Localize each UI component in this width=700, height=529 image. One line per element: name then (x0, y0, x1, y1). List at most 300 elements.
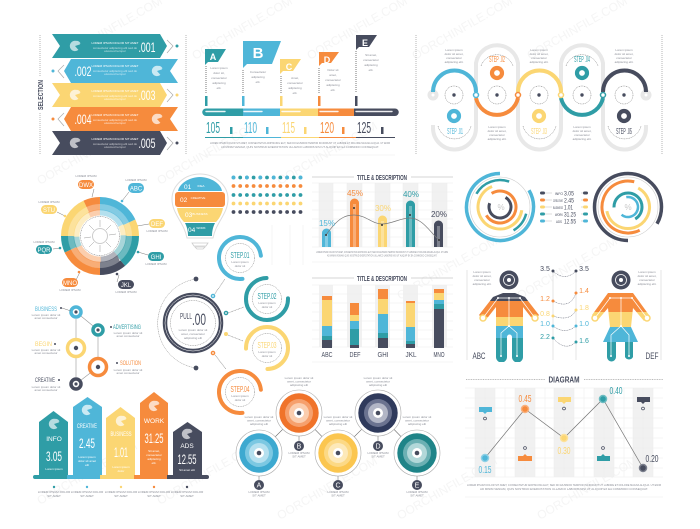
step 02 (246, 278, 288, 320)
band 04: WORK (196, 226, 206, 230)
arrow info (39, 411, 68, 476)
step 01 (217, 235, 263, 281)
arrow captions: SIT AMET (80, 494, 94, 498)
node begin: amet consectetur (34, 351, 58, 355)
connectors (211, 279, 244, 369)
point values: 0.45 (518, 394, 532, 405)
donut chart (50, 186, 150, 286)
node advertising: amet consectetur (116, 334, 140, 338)
point values: 0.30 (558, 446, 571, 457)
rings legend: 31.25 (564, 212, 577, 218)
circle D: adipiscing elit (369, 383, 387, 387)
circle C: Lorem ipsum dolor sit (324, 415, 352, 419)
circle D (355, 376, 401, 458)
stack ABC (322, 296, 332, 348)
circle C: SIT AMET (331, 494, 345, 498)
step 02: dolor sit (262, 305, 272, 309)
ribbon 005: LOREM IPSUM DOLOR SIT AMET (92, 137, 139, 141)
arrow business (106, 407, 135, 476)
arrow captions: SIT AMET (180, 494, 194, 498)
watermark: OORCHINFILE.COM (154, 439, 260, 508)
measure values right: 1.8 (579, 305, 589, 312)
circle C: adipiscing elit (329, 422, 347, 426)
step captions: adipiscing elit. (488, 137, 507, 141)
step 01: STEP.01 (230, 251, 250, 260)
flag C: Amet, (291, 76, 299, 80)
arrow work: consectetur (146, 453, 162, 457)
figure notes: dolor sit amet, (638, 274, 657, 278)
category labels: ABC (322, 352, 332, 359)
panel: circles a to e (236, 376, 440, 498)
ribbon 004: LOREM IPSUM DOLOR SIT AMET (92, 113, 139, 117)
point values: 0.15 (478, 465, 492, 476)
measure values left: 1.2 (540, 296, 550, 303)
step 04: Lorem ipsum (231, 394, 249, 398)
node creative: amet consectetur (34, 388, 58, 392)
coloured wave (433, 70, 646, 115)
ribbon 005: eiusmod tempor (104, 145, 126, 149)
arrow creative: elit (85, 463, 89, 467)
circle D: LOREM IPSUM (367, 451, 389, 455)
donut labels: LOREM IPSUM (145, 262, 167, 266)
node business: BUSINESS (35, 306, 57, 313)
bulb base (192, 243, 208, 249)
step labels (447, 55, 632, 136)
bar values: 15% (319, 219, 335, 228)
node advertising: ADVERTISING (113, 324, 141, 331)
step captions: Lorem ipsum (530, 48, 548, 52)
flag D (318, 52, 341, 106)
timeline values (205, 120, 395, 138)
figure notes: adipiscing elit. (473, 282, 492, 286)
ribbon 002: .002 (74, 63, 92, 79)
watermark: OORCHINFILE.COM (34, 439, 140, 508)
category labels: JKL (406, 352, 417, 359)
heading: selection: SELECTION (38, 80, 45, 110)
arrow ads: 12.55 (178, 451, 197, 467)
timeline caption: LOREM IPSUM DOLOR SIT AMET, CONSECTETUR ADIPISCING ELIT, SED DO EIUSMOD TEMPOR INCIDIDUNT UT LABORE ET DOLORE MAGNA ALIQUA. UT ENIM (210, 141, 390, 145)
circle B: Lorem ipsum dolor sit (285, 376, 314, 380)
step captions: Lorem ipsum (445, 48, 463, 52)
step captions: adipiscing elit. (573, 137, 592, 141)
step 03: dolor sit (262, 354, 272, 358)
ribbon 004 (52, 107, 178, 131)
dots grid (234, 178, 300, 212)
flag B: adipiscing (251, 75, 265, 79)
node solution: Lorem ipsum dolor sit (114, 368, 142, 372)
ribbon 001: LOREM IPSUM DOLOR SIT AMET (92, 41, 139, 45)
point values (478, 386, 659, 476)
flag D: adipiscing (326, 83, 340, 87)
step 01: dolor sit (235, 264, 245, 268)
step captions: Lorem ipsum (615, 48, 633, 52)
circle C (315, 415, 361, 498)
flag A: consectetur (211, 76, 227, 80)
flag A: A (210, 52, 217, 62)
donut labels: PQR (37, 248, 51, 254)
circle B: adipiscing elit (290, 383, 308, 387)
circle E: Lorem ipsum dolor sit (403, 415, 432, 419)
stack JKL (406, 301, 415, 348)
figure notes: dolor sit amet, (473, 274, 492, 278)
measure values left: 0.8 (540, 311, 550, 318)
circle C: LOREM IPSUM (327, 490, 349, 494)
ribbon 003: LOREM IPSUM DOLOR SIT AMET (92, 89, 139, 93)
rings legend: 1.01 (564, 206, 574, 212)
circle D: Lorem ipsum dolor sit (364, 376, 392, 380)
arrow info: INFO (46, 436, 62, 443)
connectors (259, 413, 417, 453)
stack GHI (378, 289, 388, 348)
arrow captions: LOREM IPSUM DOLOR (138, 490, 171, 494)
trend line (325, 207, 440, 241)
arrow work: elit. (152, 461, 156, 465)
ribbon 002: LOREM IPSUM DOLOR SIT AMET (92, 64, 139, 68)
chart grid (312, 183, 453, 247)
ribbon 001: consectetur adipiscing elit sed do (93, 46, 137, 50)
donut labels: LOREM IPSUM (125, 178, 147, 182)
band 01: IDEA (197, 184, 205, 188)
figure ABC (479, 270, 539, 362)
band 02 (175, 192, 225, 207)
measure values right: 1.0 (579, 321, 589, 328)
arrow business: BUSINESS (110, 431, 132, 438)
watermark: OORCHINFILE.COM (394, 454, 500, 523)
circle D: amet, consectetur (366, 380, 390, 384)
step captions: dolor sit amet, (615, 52, 634, 56)
panel: wave steps: STEP .05 (616, 127, 632, 136)
ribbon 004: .004 (74, 111, 92, 127)
step captions: consectetur (446, 56, 462, 60)
node begin: Lorem ipsum dolor sit (32, 348, 60, 352)
rings left value: % (497, 203, 505, 212)
arrow creative: CREATIVE (77, 423, 97, 430)
line series (485, 399, 643, 468)
step 04: STEP.04 (230, 385, 250, 394)
arrow info: 3.05 (46, 448, 62, 464)
flag C (280, 59, 303, 106)
circle D: SIT AMET (371, 454, 385, 458)
flag E (355, 35, 379, 106)
arrow ads: ADS (180, 443, 194, 450)
donut labels: GHI (151, 255, 162, 261)
node creative (32, 377, 81, 392)
watermark: OORCHINFILE.COM (34, 119, 140, 188)
circle A: Lorem ipsum dolor sit (245, 415, 274, 419)
pull circle: PULL (180, 312, 192, 321)
timeline values: 115 (282, 120, 295, 137)
step labels: STEP .02 (489, 55, 505, 64)
rings legend: 12.55 (564, 220, 577, 226)
category labels: MNO (434, 352, 445, 359)
step 01: Lorem ipsum (231, 260, 249, 264)
node business: Lorem ipsum dolor sit (32, 313, 60, 317)
arrow captions: LOREM IPSUM DOLOR (171, 490, 204, 494)
step captions (445, 48, 634, 141)
flag E: E (362, 38, 368, 48)
pull circle: amet, consectetur (181, 332, 205, 336)
stack DEF (350, 303, 359, 348)
bar values: 45% (347, 189, 363, 198)
bars (322, 198, 443, 247)
circle B: SIT AMET (292, 454, 306, 458)
panel: lightbulb (172, 174, 228, 249)
step captions: dolor sit amet, (530, 52, 549, 56)
pull circle: .00 (192, 310, 206, 329)
bar values: 20% (431, 210, 447, 219)
panel: stacked bars (312, 276, 453, 362)
ribbon 002: consectetur adipiscing elit sed do (93, 69, 137, 73)
donut labels: MNO (63, 281, 77, 287)
flag A: dolor sit, (213, 71, 225, 75)
arrow business: 1.01 (114, 444, 128, 460)
arrow captions (38, 486, 204, 498)
flag C: consectetur (287, 81, 303, 85)
step captions: consectetur (574, 133, 590, 137)
step captions: adipiscing elit. (445, 60, 464, 64)
watermark: OORCHINFILE.COM (514, 234, 620, 303)
figure notes (472, 270, 659, 361)
arrow work (140, 392, 168, 476)
category labels: GHI (378, 352, 389, 359)
step 02: Lorem ipsum (258, 301, 276, 305)
step captions: adipiscing elit. (530, 60, 549, 64)
figure notes: DEF (646, 351, 659, 361)
ribbon 003: eiusmod tempor (104, 97, 126, 101)
tags (479, 397, 650, 461)
arrow work: 31.25 (144, 430, 164, 446)
arrow ads: Sit amet elit (179, 468, 195, 472)
arrow work: adipiscing (147, 457, 161, 461)
circle A: A (257, 482, 262, 490)
band 03: BUSINESS (192, 212, 208, 216)
donut labels: LOREM IPSUM (146, 229, 168, 233)
rings legend: BUSINESS (553, 206, 563, 210)
figure notes: ABC (472, 351, 486, 361)
panel: selection ribbons (38, 34, 178, 155)
panel: arrow columns (33, 392, 209, 498)
panel: process nodes (32, 306, 142, 392)
step labels: STEP .04 (574, 55, 590, 64)
ribbon 005 (52, 131, 178, 155)
band 04: 04 (188, 227, 196, 234)
category labels (312, 352, 453, 362)
grid (465, 388, 663, 477)
step captions: consectetur (489, 133, 505, 137)
ribbon 002 (52, 59, 178, 83)
circle B: B (297, 444, 302, 450)
pull circle: adipiscing elit (184, 336, 202, 340)
measure curves (553, 271, 576, 346)
circle E: LOREM IPSUM (406, 490, 428, 494)
measure values left: 3.5 (540, 266, 550, 273)
arrow captions: SIT AMET (114, 494, 128, 498)
node begin: BEGIN (35, 341, 52, 348)
step captions: dolor sit amet, (488, 129, 507, 133)
rings right (593, 172, 663, 242)
panel: steps cluster (158, 235, 288, 415)
step captions: consectetur (616, 56, 632, 60)
arrow info: Lorem ipsum (45, 467, 63, 471)
donut labels: DEF (151, 222, 163, 228)
watermark: OORCHINFILE.COM (154, 119, 260, 188)
circle E (394, 415, 440, 498)
node solution: SOLUTION (120, 360, 141, 367)
donut labels: STU (43, 208, 55, 214)
heading: DIAGRAM (548, 374, 580, 384)
circle E: SIT AMET (410, 494, 424, 498)
bar values: 30% (375, 204, 391, 213)
timeline values: 120 (320, 120, 334, 137)
timeline bar (202, 108, 399, 116)
flag C: adipiscing (288, 86, 302, 90)
step captions: adipiscing elit. (615, 60, 634, 64)
measure values right: 1.4 (579, 288, 589, 295)
circle C: C (335, 482, 341, 490)
flag E: consectetur (363, 58, 379, 62)
step 04 (217, 369, 263, 415)
category labels: DEF (350, 352, 360, 359)
figure notes: consectetur (639, 278, 655, 282)
timeline values: 110 (244, 120, 257, 137)
ribbon 003 (52, 83, 178, 107)
donut labels: LOREM IPSUM (33, 240, 55, 244)
caption (312, 250, 453, 262)
arrow creative: dolor sit amet (78, 459, 96, 463)
arrow work: Sit amet, (148, 449, 160, 453)
flag B: Consectetur (250, 70, 266, 74)
ribbon 004: consectetur adipiscing elit sed do (93, 118, 137, 122)
pull circle (158, 277, 221, 370)
panel: wave steps (430, 45, 650, 149)
arrow creative (73, 397, 102, 476)
rings legend (540, 190, 588, 226)
circle A (236, 415, 282, 498)
figure notes: adipiscing elit. (638, 282, 657, 286)
figure notes: Lorem ipsum (638, 270, 656, 274)
timeline caption: AD MINIM VENIAM, QUIS NOSTRUD EXERCITATION ULLAMCO LABORIS NISI UT ALIQUIP EX EA COMMODO CONSEQUAT. (221, 145, 379, 149)
ribbon 005: consectetur adipiscing elit sed do (93, 142, 137, 146)
rings left (454, 161, 546, 253)
node centres (438, 55, 641, 139)
step rings (449, 68, 629, 121)
flag D: elit. (331, 88, 335, 92)
flag B (242, 41, 281, 106)
rings legend: 2.45 (564, 198, 575, 204)
measure values right: 3.5 (579, 266, 589, 273)
heading: TITLE & DESCRIPTION (357, 175, 407, 182)
band 03: 03 (185, 212, 193, 219)
arrow captions: LOREM IPSUM DOLOR (38, 490, 71, 494)
bar values (319, 189, 447, 228)
circle D: D (375, 444, 381, 450)
panel: flag timeline (202, 35, 399, 155)
band 03 (177, 208, 223, 222)
measure values right: 1.6 (579, 338, 589, 345)
node advertising: Lorem ipsum dolor sit (114, 331, 142, 335)
flag D: consectetur (325, 78, 341, 82)
panel: donut wheel (33, 174, 168, 294)
flag C: elit. (293, 91, 297, 95)
timeline values: 125 (357, 120, 371, 137)
arrow creative: Lorem ipsum (78, 455, 96, 459)
step captions: dolor sit amet, (445, 52, 464, 56)
ribbon 001: eiusmod tempor (104, 49, 126, 53)
donut labels: JKL (121, 283, 132, 289)
circle C: amet, consectetur (326, 418, 350, 422)
node creative: CREATIVE (35, 377, 55, 384)
donut labels: ABC (130, 186, 143, 192)
node advertising (93, 324, 142, 338)
rings legend: WORK (555, 213, 563, 217)
flag A (205, 49, 228, 106)
bulb outline (172, 174, 228, 238)
rings legend: 3.05 (564, 192, 575, 198)
caption (465, 483, 663, 497)
flag E: elit. (369, 68, 373, 72)
axis lines (467, 270, 661, 360)
bar values: 40% (403, 190, 419, 199)
step 04: dolor sit (235, 398, 245, 402)
step 03 (246, 327, 288, 369)
watermark: OORCHINFILE.COM (394, 234, 500, 303)
node solution (90, 358, 142, 376)
band 01 (178, 177, 222, 191)
arrow business: Lorem ipsum (112, 465, 130, 469)
flag A: adipiscing (212, 81, 226, 85)
flag B: B (253, 45, 264, 62)
arrow business: dolor (118, 469, 124, 473)
flag C: C (286, 62, 293, 72)
flag B: elit. (256, 80, 260, 84)
arrow work: WORK (144, 418, 165, 425)
circle A: LOREM IPSUM (248, 490, 270, 494)
step captions: Lorem ipsum (488, 125, 506, 129)
ribbon 002: eiusmod tempor (104, 72, 126, 76)
flag A: elit. (217, 86, 221, 90)
circle B: amet, consectetur (287, 380, 311, 384)
caption: AD MINIM VENIAM, QUIS NOSTRUD EXERCITATION ULLAMCO LABORIS NISI UT ALIQUIP EX EA COMMODO CONSEQUAT. (480, 487, 648, 491)
step captions: dolor sit amet, (573, 129, 592, 133)
flag E: Sit amet, (365, 53, 377, 57)
rings right value: % (624, 203, 632, 212)
circle E: amet, consectetur (405, 418, 429, 422)
node begin (32, 340, 84, 356)
measure values left: 1.0 (540, 321, 550, 328)
panel: title description line bars (312, 175, 453, 262)
arrow creative: 2.45 (79, 435, 95, 451)
figure notes: consectetur (474, 278, 490, 282)
measure values right (574, 266, 589, 345)
rings legend: ADS (556, 220, 563, 224)
step 02: STEP.02 (258, 292, 277, 301)
rings legend: INFO (555, 192, 563, 196)
arrow ads (173, 422, 202, 476)
figure notes: Lorem ipsum (473, 270, 491, 274)
circle E: adipiscing elit (408, 422, 426, 426)
step captions: consectetur (531, 56, 547, 60)
donut labels (33, 174, 168, 294)
band 02: 02 (180, 197, 188, 204)
donut labels: DWX (79, 183, 93, 189)
gray track (430, 45, 650, 149)
node business (32, 306, 81, 320)
ribbon 001: .001 (138, 39, 156, 55)
caption: AD MINIM VENIAM, QUIS NOSTRUD EXERCITATION ULLAMCO LABORIS NISI UT ALIQUIP EX EA COMMODO CONSEQUAT. (327, 254, 437, 258)
timeline values: 105 (206, 120, 220, 137)
caption: LOREM IPSUM DOLOR SIT AMET, CONSECTETUR ADIPISCING ELIT, SED DO EIUSMOD TEMPOR INCIDIDUNT UT LABORE ET DOLORE MAGNA ALIQUA. UT ENIM (467, 483, 661, 487)
flag D: Dolor sit (327, 68, 339, 72)
